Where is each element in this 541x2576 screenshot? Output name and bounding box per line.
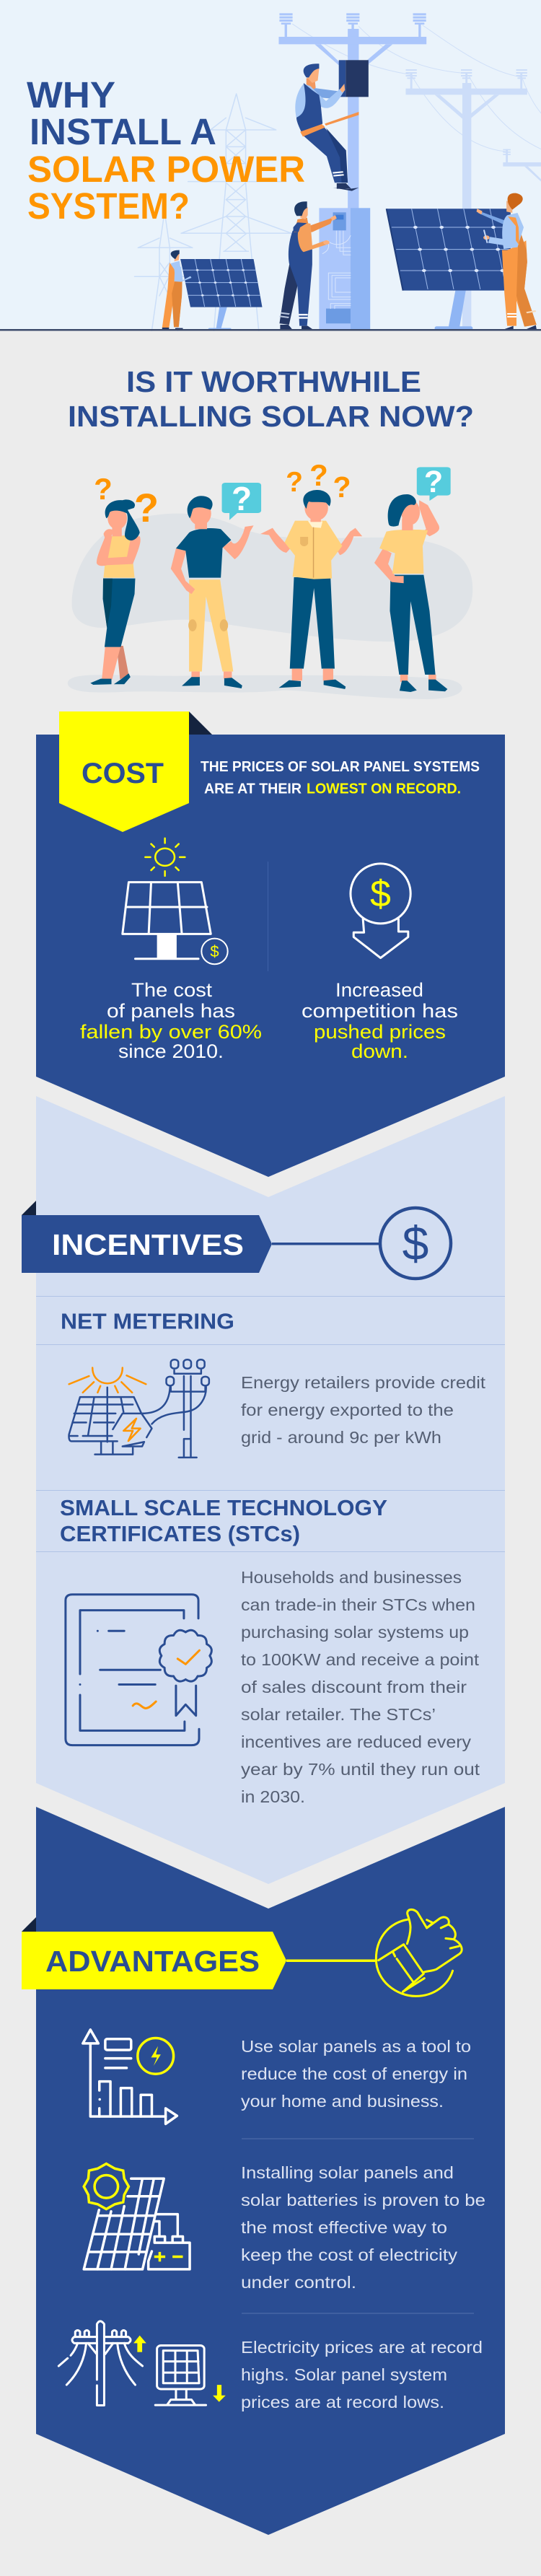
speech bubbles <box>222 467 451 520</box>
title: why install a solar power system <box>27 74 305 227</box>
icon: thumbs up with connector <box>286 1909 462 1996</box>
title: why install a solar power system: SOLAR POWER <box>27 149 305 190</box>
person 3: man in yellow shirt <box>260 490 362 689</box>
text: net metering: grid - around 9c per kWh <box>241 1428 441 1447</box>
text: cost of panels: The cost <box>131 979 213 1001</box>
icon: solar panel with sun and coin <box>123 838 228 964</box>
banner: cost <box>59 711 189 832</box>
illustration: small worker <box>162 250 191 330</box>
illustration: small solar panel <box>180 259 263 330</box>
heading: cost: COST <box>82 758 164 789</box>
text: net metering: Energy retailers provide credit <box>241 1373 486 1392</box>
question marks: ? <box>424 465 443 499</box>
question marks: ? <box>309 458 328 492</box>
icon: dollar circle with connector: $ <box>403 1217 428 1270</box>
text: solar batteries: the most effective way to <box>241 2218 447 2237</box>
text: increased competition: competition has <box>302 1000 458 1022</box>
panel: cost <box>36 711 505 1177</box>
illustration: worker holding large panel <box>477 193 537 330</box>
text: prices at lowest: LOWEST ON RECORD. <box>307 781 461 797</box>
text: cost of panels: since 2010. <box>118 1041 224 1062</box>
text: cost of panels: fallen by over 60% <box>80 1021 262 1043</box>
illustration: wires <box>293 24 541 152</box>
text: electricity prices: Electricity prices are at record <box>241 2338 483 2357</box>
title: why install a solar power system: WHY <box>27 74 115 115</box>
text: electricity prices: prices are at record lows. <box>241 2393 444 2411</box>
text: solar batteries <box>241 2163 485 2292</box>
illustration: pole box <box>339 60 369 97</box>
question marks: ? <box>333 470 351 504</box>
question marks: ? <box>94 472 113 506</box>
text: increased competition: Increased <box>335 979 423 1001</box>
illustration: background pylons <box>135 94 291 330</box>
hero illustration panel <box>0 0 541 330</box>
text: increased competition: pushed prices <box>314 1021 446 1043</box>
illustration: main pole <box>278 13 426 211</box>
question marks: ? <box>134 485 159 530</box>
text: stcs: solar retailer. The STCs’ <box>241 1705 436 1724</box>
text: stcs <box>241 1568 480 1806</box>
illustration: worker climbing pole <box>295 63 359 191</box>
banner fold <box>22 1201 36 1215</box>
ground line <box>0 329 541 330</box>
icon: solar panel and battery <box>84 2164 190 2269</box>
text: increased competition <box>302 979 458 1062</box>
heading: advantages: ADVANTAGES <box>45 1945 260 1978</box>
title: why install a solar power system: SYSTEM? <box>27 185 190 227</box>
text: reduce cost of energy: Use solar panels as a tool to <box>241 2037 471 2056</box>
question marks: ? <box>286 467 303 498</box>
heading: is it worthwhile: IS IT WORTHWHILE <box>126 365 421 398</box>
heading: is it worthwhile: INSTALLING SOLAR NOW? <box>68 400 474 433</box>
text: increased competition: down. <box>351 1041 408 1062</box>
panel: advantages <box>22 1807 505 2535</box>
banner: advantages <box>22 1932 286 1989</box>
text: stcs: of sales discount from their <box>241 1678 467 1696</box>
text: net metering <box>241 1373 486 1447</box>
text: solar batteries: keep the cost of electricity <box>241 2246 458 2264</box>
text: stcs: year by 7% until they run out <box>241 1760 480 1779</box>
text: stcs: can trade-in their STCs when <box>241 1595 475 1614</box>
icon: price down arrow <box>351 864 410 958</box>
text: stcs: purchasing solar systems up <box>241 1623 469 1642</box>
icon: price down arrow: $ <box>370 873 391 915</box>
text: solar batteries: under control. <box>241 2273 356 2292</box>
heading: small scale technology certificates: SMALL SCALE TECHNOLOGY <box>60 1495 387 1520</box>
text: electricity prices: highs. Solar panel system <box>241 2365 447 2384</box>
person 2: man in dark t-shirt <box>171 496 254 688</box>
text: net metering: for energy exported to the <box>241 1401 454 1419</box>
text: prices at lowest: THE PRICES OF SOLAR PANEL SYSTEMS <box>201 759 480 775</box>
icon: energy cost chart <box>83 2030 177 2124</box>
heading: small scale technology certificates: CERTIFICATES (STCs) <box>60 1521 300 1546</box>
text: cost of panels <box>80 979 262 1062</box>
question marks <box>94 458 443 530</box>
text: stcs: in 2030. <box>241 1787 305 1806</box>
text: prices at lowest <box>201 759 480 797</box>
text: reduce cost of energy: reduce the cost of energy in <box>241 2064 467 2083</box>
illustration: worker at meter <box>279 201 337 330</box>
background blob <box>71 514 472 641</box>
text: reduce cost of energy <box>241 2037 471 2111</box>
text: stcs: incentives are reduced every <box>241 1732 472 1751</box>
title: why install a solar power system: INSTALL A <box>30 111 216 152</box>
illustration: four confused people <box>68 458 472 699</box>
illustration: large solar panel <box>387 209 511 330</box>
heading: small scale technology certificates <box>60 1495 387 1546</box>
icon: certificate <box>66 1595 211 1745</box>
text: cost of panels: of panels has <box>107 1000 235 1022</box>
heading: incentives: INCENTIVES <box>52 1228 244 1261</box>
icon: solar panel with sun and coin: $ <box>210 942 219 960</box>
floor shadow <box>68 675 462 699</box>
banner: incentives <box>22 1215 272 1273</box>
icon: net metering <box>69 1359 209 1458</box>
text: stcs: Households and businesses <box>241 1568 462 1587</box>
illustration: far pole <box>405 69 541 330</box>
question marks: ? <box>232 480 252 517</box>
banner fold <box>189 711 212 735</box>
heading: is it worthwhile <box>68 365 474 433</box>
text: solar batteries: solar batteries is proven to be <box>241 2191 485 2209</box>
text: solar batteries: Installing solar panels and <box>241 2163 454 2182</box>
icon: electricity prices up and solar prices down <box>58 2321 226 2406</box>
text: electricity prices <box>241 2338 483 2411</box>
panel: incentives <box>22 1096 505 1884</box>
illustration: meter cabinet <box>319 208 370 330</box>
text: reduce cost of energy: your home and business. <box>241 2092 444 2111</box>
heading: net metering: NET METERING <box>61 1309 234 1333</box>
icon: dollar circle with connector <box>272 1208 451 1279</box>
person 4: woman scratching head <box>374 494 447 692</box>
banner fold <box>22 1917 36 1932</box>
text: stcs: to 100KW and receive a point <box>241 1650 480 1669</box>
person 1: woman thinking <box>90 499 141 685</box>
text: prices at lowest: ARE AT THEIR <box>204 781 302 797</box>
